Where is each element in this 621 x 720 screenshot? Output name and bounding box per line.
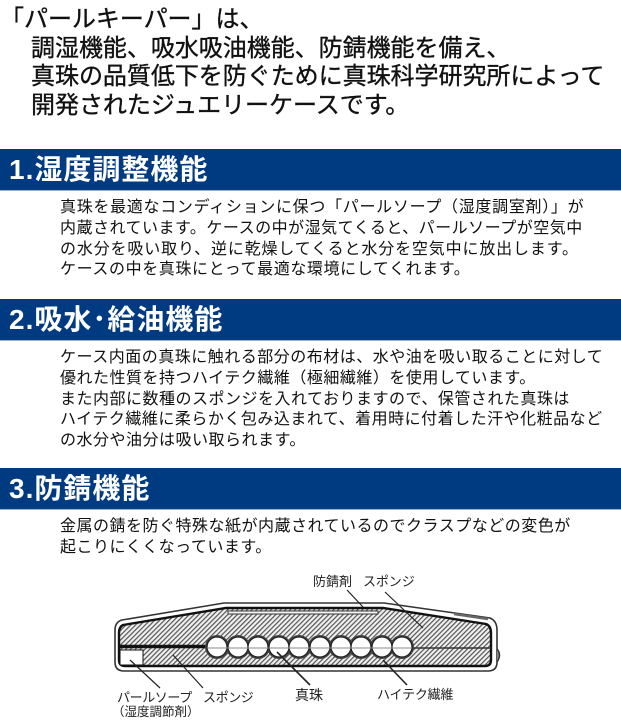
leader lines — [130, 590, 423, 688]
diagram labels — [112, 574, 453, 719]
text block: humidity: ケースの中を真珠にとって最適な環境にしてくれます。 — [60, 261, 470, 278]
pearls — [205, 635, 414, 659]
text block: absorption: の水分や油分は吸い取られます。 — [60, 432, 306, 449]
text block: humidity — [60, 198, 584, 278]
title: 真珠の品質低下を防ぐために真珠科学研究所によって — [31, 63, 604, 90]
text block: rust prevention: 起こりにくくなっています。 — [60, 539, 272, 556]
text block: humidity: の水分を吸い取り、逆に乾燥してくると水分を空気中に放出します。 — [60, 241, 579, 258]
text block: absorption: 優れた性質を持つハイテク繊維（極細繊維）を使用しています。 — [60, 370, 536, 387]
text block: humidity: 真珠を最適なコンディションに保つ「パールソープ（湿度調室剤）」が — [60, 199, 584, 216]
diagram labels: パールソープ — [117, 690, 192, 705]
text block: absorption: ケース内面の真珠に触れる部分の布材は、水や油を吸い取ることに対して — [60, 349, 603, 366]
title — [0, 6, 604, 119]
text block: absorption: ハイテク繊維に柔らかく包み込まれて、着用時に付着した汗や化粧品など — [60, 411, 603, 428]
text block: absorption — [60, 348, 603, 449]
text block: rust prevention: 金属の錆を防ぐ特殊な紙が内蔵されているのでクラスプなどの変色が — [60, 518, 571, 535]
heading: 1 humidity — [0, 149, 621, 191]
diagram labels: ハイテク繊維 — [377, 687, 453, 702]
heading: 2 absorption — [0, 299, 621, 341]
text block: humidity: 内蔵されています。ケースの中が湿気てくると、パールソープが空気中 — [60, 220, 583, 237]
case body — [115, 603, 500, 671]
diagram labels: 真珠 — [295, 687, 323, 703]
heading: 3 rust prevention — [0, 468, 621, 510]
diagram labels: スポンジ — [203, 690, 254, 705]
heading: 3 rust prevention: 3.防錆機能 — [9, 473, 150, 504]
title: 調湿機能、吸水吸油機能、防錆機能を備え、 — [31, 35, 510, 62]
heading: 1 humidity: 1.湿度調整機能 — [9, 154, 208, 185]
diagram labels: 防錆剤 — [313, 574, 352, 589]
title: 「パールキーパー」は、 — [0, 6, 263, 33]
heading: 2 absorption: 2.吸水･給油機能 — [9, 304, 223, 335]
text block: absorption: また内部に数種のスポンジを入れておりますので、保管された真珠は — [60, 391, 570, 408]
diagram labels: スポンジ — [363, 574, 415, 589]
title: 開発されたジュエリーケースです。 — [31, 92, 409, 119]
diagram labels: （湿度調節剤） — [112, 704, 200, 719]
text block: rust prevention — [60, 517, 571, 556]
